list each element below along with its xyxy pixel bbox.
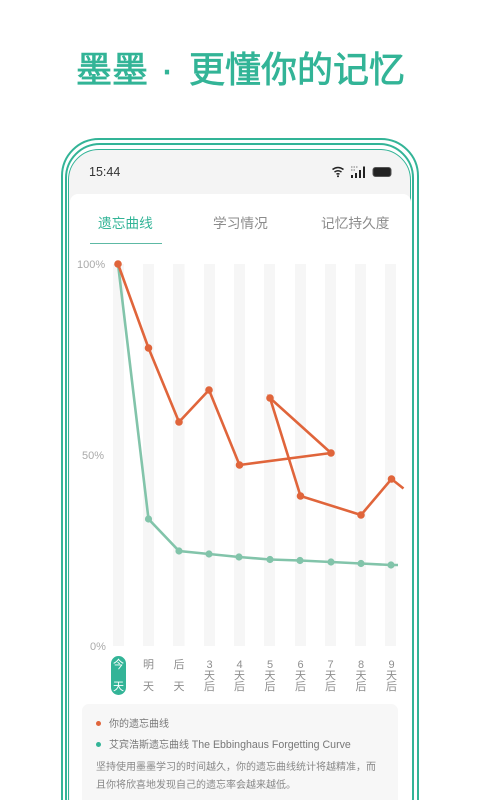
title xyxy=(76,49,405,90)
tab: memory durability: 记忆持久度 xyxy=(321,216,389,230)
x axis: day labels: 后 xyxy=(386,680,397,692)
x axis: day labels: 8 xyxy=(358,659,364,671)
x axis: day labels: 后 xyxy=(264,680,276,692)
your forgetting curve xyxy=(114,260,403,519)
x axis: day labels: 明 xyxy=(143,659,154,671)
content panel xyxy=(70,194,410,800)
x axis: day labels: 后 xyxy=(356,680,366,692)
x axis: day labels: 天 xyxy=(174,680,184,692)
x axis: day labels: 6 xyxy=(297,659,304,671)
x axis: day labels: 天 xyxy=(356,670,366,682)
legend text: Ebbinghaus: 艾宾浩斯遗忘曲线 The Ebbinghaus Forgetting Curve xyxy=(109,739,351,751)
tabs xyxy=(90,216,389,244)
x axis: day labels: 5 xyxy=(267,659,273,671)
x axis: today pill: 天 xyxy=(113,680,124,692)
x axis: day labels: 4 xyxy=(236,659,243,671)
x axis: day labels: 后 xyxy=(295,680,306,692)
Ebbinghaus curve xyxy=(118,264,398,569)
x axis: day labels: 7 xyxy=(327,659,334,671)
legend text: your curve: 你的遗忘曲线 xyxy=(109,719,169,730)
legend description: 坚持使用墨墨学习的时间越久，你的遗忘曲线统计将越精准，而且你将欣喜地发现自己的遗忘率会越来越低。 xyxy=(96,762,376,791)
x axis: day labels: 天 xyxy=(143,680,154,692)
title: 墨墨 xyxy=(76,49,148,90)
x axis: day labels: 天 xyxy=(295,670,306,682)
x axis: day labels: 9 xyxy=(388,659,395,671)
x axis: today pill: 今 xyxy=(113,658,124,670)
x axis: day labels: 后 xyxy=(174,659,184,671)
tab: learning status: 学习情况 xyxy=(213,216,268,230)
axis label 100%: 100% xyxy=(77,259,105,271)
active tab underline xyxy=(90,243,162,244)
x axis: day labels: 天 xyxy=(325,670,336,682)
legend dot: your curve xyxy=(96,721,100,726)
x axis: day labels: 天 xyxy=(386,670,397,682)
x axis: day labels: 后 xyxy=(234,680,245,692)
x axis: day labels: 3 xyxy=(206,659,213,671)
status bar icons xyxy=(332,166,392,178)
status bar time: 15:44 xyxy=(89,165,120,179)
tab: forgetting curve (active): 遗忘曲线 xyxy=(98,216,153,230)
axis label 50%: 50% xyxy=(82,450,104,462)
axis label 0%: 0% xyxy=(90,641,106,653)
x axis: day labels: 后 xyxy=(325,680,336,692)
x axis: day labels xyxy=(143,658,397,692)
x axis: day labels: 天 xyxy=(264,670,276,682)
x axis: day labels: 天 xyxy=(234,670,245,682)
x axis: day labels: 天 xyxy=(204,670,215,682)
legend dot: Ebbinghaus xyxy=(96,742,100,747)
phone frame xyxy=(61,138,418,800)
title: · xyxy=(161,49,173,90)
title: 更懂你的记忆 xyxy=(189,49,405,90)
x axis: day labels: 后 xyxy=(204,680,215,692)
legend panel xyxy=(82,704,398,800)
x axis: today pill xyxy=(111,656,126,695)
